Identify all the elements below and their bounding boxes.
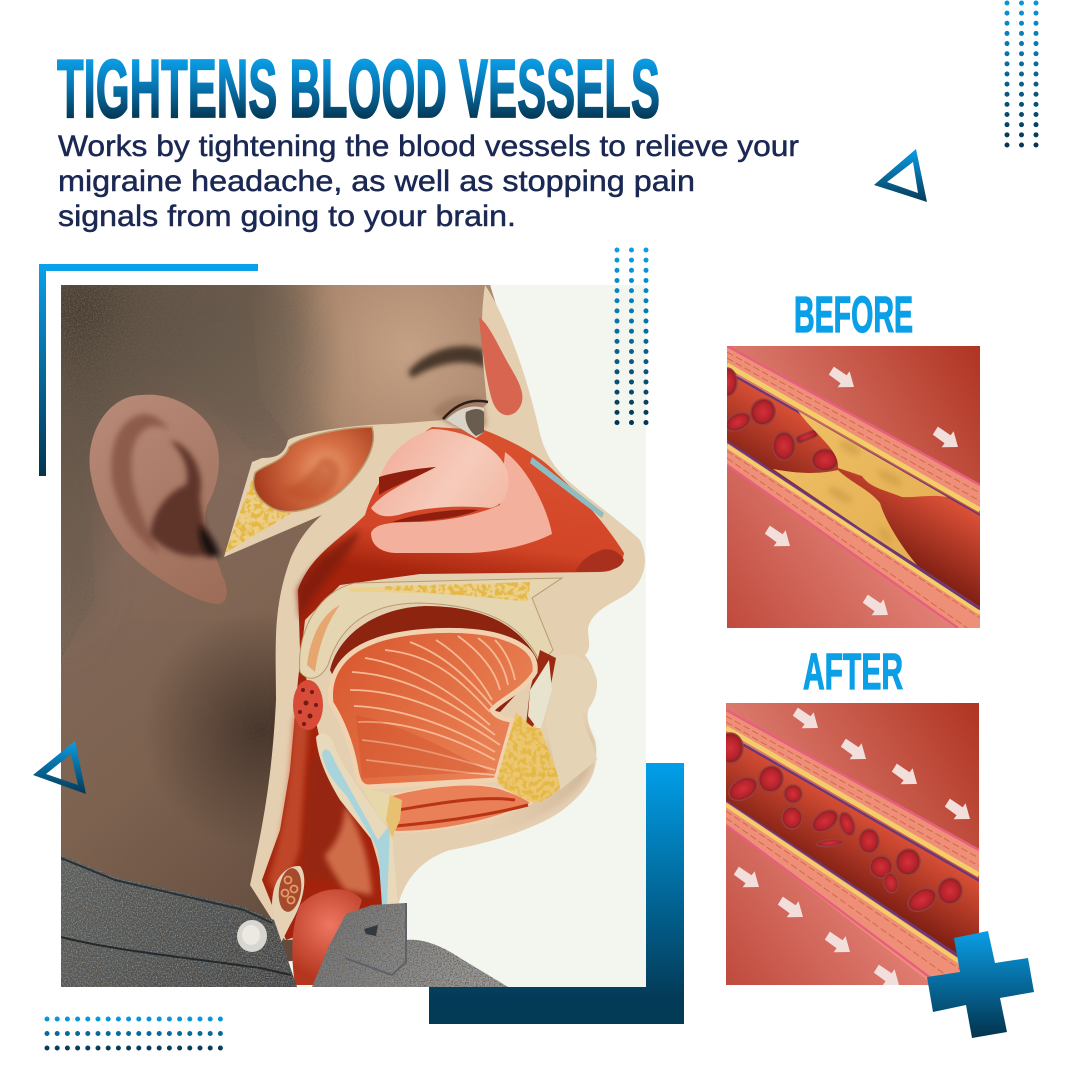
eye: [432, 396, 488, 438]
sphenoid sinus: [254, 427, 373, 512]
body text: [58, 130, 799, 233]
nasal cavity: [262, 427, 624, 940]
dot grid: bottom left: [47, 1019, 224, 1048]
pressure arrows: [734, 708, 970, 985]
mouth cavity: [330, 606, 540, 712]
shirt: button: [237, 920, 267, 952]
bone spongy patch: sphenoid: [225, 480, 292, 553]
panel: after artery: [717, 703, 979, 990]
dot grid: over photo: [617, 250, 646, 426]
tongue: [330, 630, 535, 787]
triangle: left: [33, 741, 86, 794]
floor of mouth muscles: [362, 785, 532, 832]
lumen: [726, 746, 979, 954]
plaque: [798, 411, 947, 497]
body text: Works by tightening the blood vessels to relieve your: [58, 130, 799, 163]
hard palate: [300, 578, 562, 678]
jaw bone: [497, 712, 560, 803]
ear: [90, 395, 227, 604]
red blood cells: [717, 733, 965, 916]
eyebrow: [408, 346, 486, 378]
tonsil: [293, 680, 323, 730]
epiglottis: [316, 733, 402, 905]
shirt: dark collar: [61, 855, 297, 987]
triangle: top right: [874, 149, 927, 202]
lower turbinate: [371, 452, 552, 553]
heading: before: BEFORE: [794, 286, 913, 343]
frontal sinus: [479, 317, 522, 415]
photo: head cross-section: [61, 285, 646, 987]
body text: migraine headache, as well as stopping pain: [58, 165, 695, 198]
lumen: [727, 373, 980, 607]
red blood cells: [717, 368, 838, 471]
palate bone spongy: [350, 582, 530, 602]
bracket: bottom right: [429, 763, 684, 1024]
panel: before artery: [717, 346, 980, 630]
nasal cartilage: [530, 457, 604, 518]
trachea ring: [272, 866, 304, 945]
body text: signals from going to your brain.: [58, 200, 516, 233]
artery walls: [726, 710, 979, 875]
icon: medical cross: [927, 931, 1034, 1038]
skin of head and neck: [61, 285, 496, 962]
soft tooth and lip: [549, 672, 598, 790]
shirt: right collar: [312, 903, 508, 987]
pressure arrows: [765, 367, 958, 615]
artery walls: [727, 346, 980, 510]
bracket: top left: [39, 264, 258, 476]
chin shading: [532, 730, 594, 815]
anatomy: cream cut-away silhouette: [224, 285, 645, 940]
photo backdrop: [288, 285, 646, 987]
heading: after: AFTER: [803, 643, 903, 700]
upper turbinate: [371, 429, 509, 516]
dot grid: top right: [1007, 3, 1036, 148]
throat: [292, 889, 362, 985]
